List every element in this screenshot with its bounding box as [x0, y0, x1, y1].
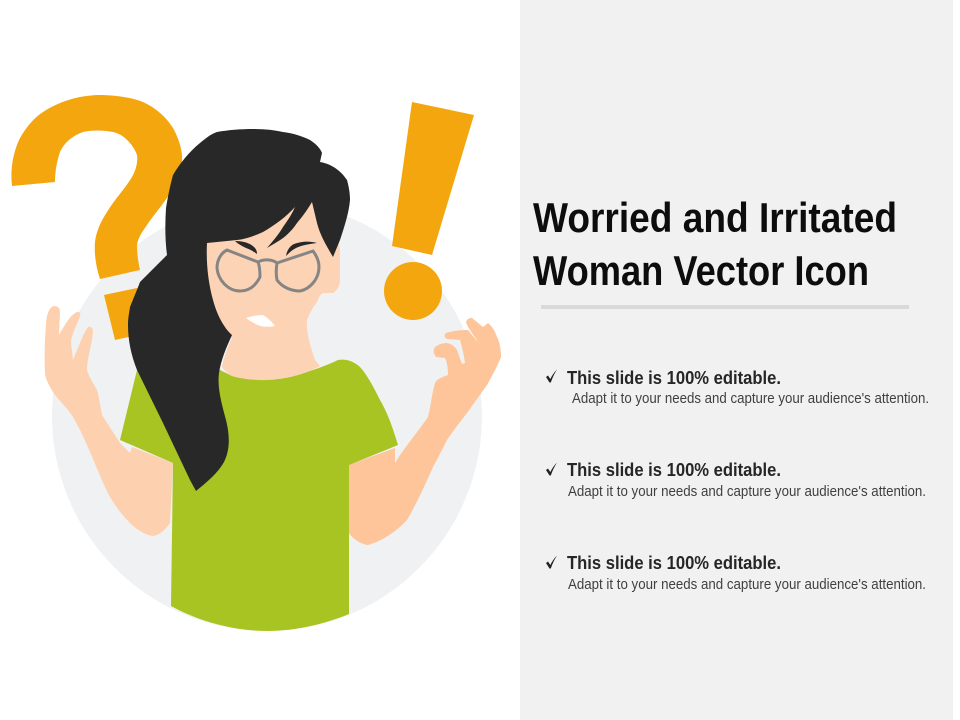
divider — [541, 305, 909, 309]
torso shirt — [120, 360, 398, 631]
bullet item 3 — [546, 553, 926, 593]
heading: Worried and Irritated — [533, 194, 897, 241]
right arm and hand — [348, 318, 501, 545]
bullet item 1: This slide is 100% editable. — [567, 368, 781, 388]
bullet item 3: This slide is 100% editable. — [567, 553, 781, 573]
bullet item 2 — [546, 460, 926, 500]
neck and face — [205, 190, 340, 380]
icon: question mark — [11, 95, 182, 340]
glasses — [217, 250, 319, 291]
background circle — [52, 201, 482, 631]
icon: exclamation mark — [384, 102, 474, 320]
hair — [128, 129, 350, 491]
bullet item 1 — [546, 368, 929, 407]
mouth — [246, 315, 275, 327]
panel: right text background — [520, 0, 953, 720]
heading: Woman Vector Icon — [533, 247, 869, 294]
bullet item 2: This slide is 100% editable. — [567, 460, 781, 480]
eyebrows — [235, 241, 317, 256]
heading — [533, 194, 897, 294]
bullet item 2: Adapt it to your needs and capture your audience's attention. — [568, 483, 926, 500]
bullet item 3: Adapt it to your needs and capture your audience's attention. — [568, 576, 926, 593]
illustration: woman — [45, 129, 501, 631]
left arm and hand — [45, 306, 173, 536]
